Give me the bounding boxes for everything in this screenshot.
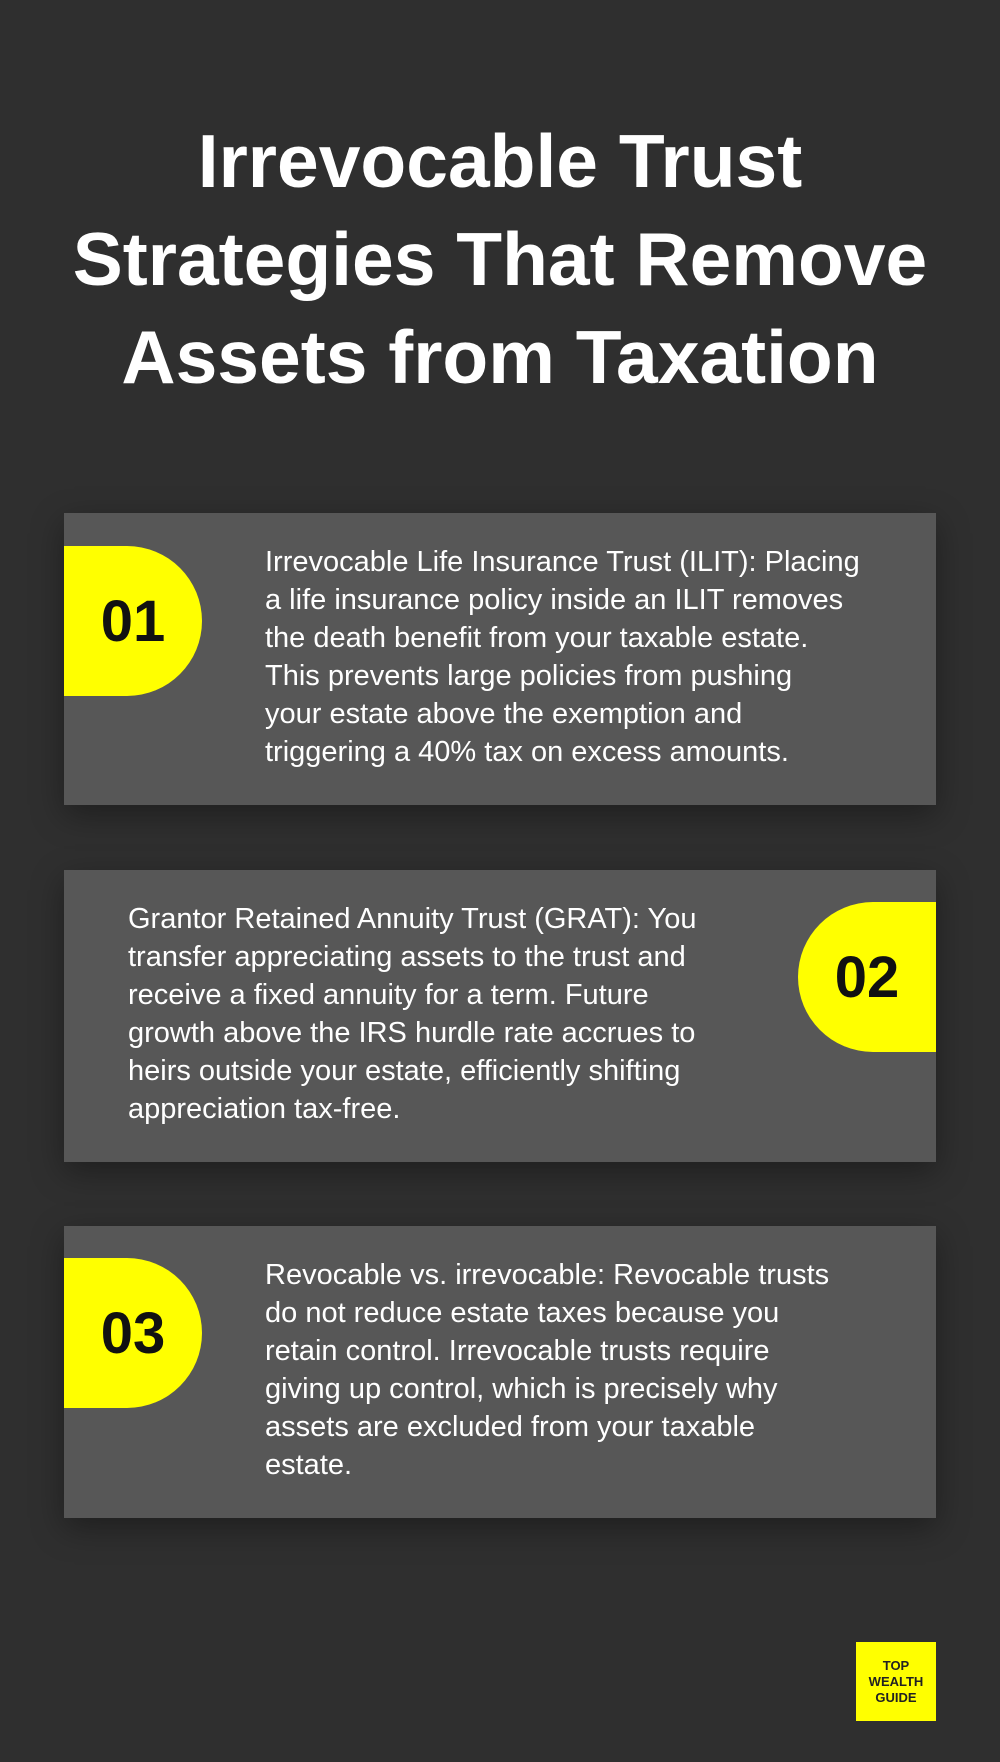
logo: GUIDE bbox=[875, 1690, 917, 1704]
panel: GRAT bbox=[64, 870, 936, 1162]
text: GRAT: Grantor Retained Annuity Trust (GRAT): You bbox=[128, 903, 696, 935]
text: revocable vs irrevocable: retain control. Irrevocable trusts require bbox=[265, 1335, 770, 1367]
panel: ILIT bbox=[64, 513, 936, 805]
text: GRAT bbox=[128, 903, 696, 1125]
title: Irrevocable Trust bbox=[198, 119, 802, 203]
title bbox=[73, 119, 927, 399]
text: revocable vs irrevocable: assets are excluded from your taxable bbox=[265, 1411, 755, 1443]
badge 03: 03 bbox=[101, 1300, 165, 1366]
badge 02 bbox=[798, 902, 936, 1052]
text: revocable vs irrevocable: Revocable vs. irrevocable: Revocable trusts bbox=[265, 1259, 829, 1291]
text: revocable vs irrevocable: do not reduce estate taxes because you bbox=[265, 1297, 779, 1329]
logo bbox=[856, 1642, 936, 1721]
text: revocable vs irrevocable bbox=[265, 1259, 829, 1481]
text: GRAT: receive a fixed annuity for a term. Future bbox=[128, 979, 649, 1011]
badge 01 bbox=[64, 546, 202, 696]
badge 02: 02 bbox=[835, 944, 899, 1010]
text: GRAT: heirs outside your estate, efficiently shifting bbox=[128, 1055, 680, 1087]
title: Strategies That Remove bbox=[73, 217, 927, 301]
text: ILIT bbox=[265, 546, 860, 768]
text: revocable vs irrevocable: estate. bbox=[265, 1449, 352, 1481]
logo: WEALTH bbox=[869, 1674, 923, 1688]
text: GRAT: appreciation tax-free. bbox=[128, 1093, 400, 1125]
text: GRAT: transfer appreciating assets to the trust and bbox=[128, 941, 686, 973]
text: ILIT: your estate above the exemption and bbox=[265, 698, 742, 730]
text: revocable vs irrevocable: giving up control, which is precisely why bbox=[265, 1373, 778, 1405]
text: ILIT: the death benefit from your taxable estate. bbox=[265, 622, 808, 654]
title: Assets from Taxation bbox=[121, 315, 879, 399]
panel: revocable vs irrevocable bbox=[64, 1226, 936, 1518]
logo: TOP bbox=[883, 1658, 909, 1672]
text: GRAT: growth above the IRS hurdle rate accrues to bbox=[128, 1017, 695, 1049]
badge 03 bbox=[64, 1258, 202, 1408]
text: ILIT: triggering a 40% tax on excess amounts. bbox=[265, 736, 789, 768]
text: ILIT: Irrevocable Life Insurance Trust (ILIT): Placing bbox=[265, 546, 860, 578]
text: ILIT: This prevents large policies from pushing bbox=[265, 660, 792, 692]
badge 01: 01 bbox=[101, 588, 165, 654]
text: ILIT: a life insurance policy inside an ILIT removes bbox=[265, 584, 843, 616]
